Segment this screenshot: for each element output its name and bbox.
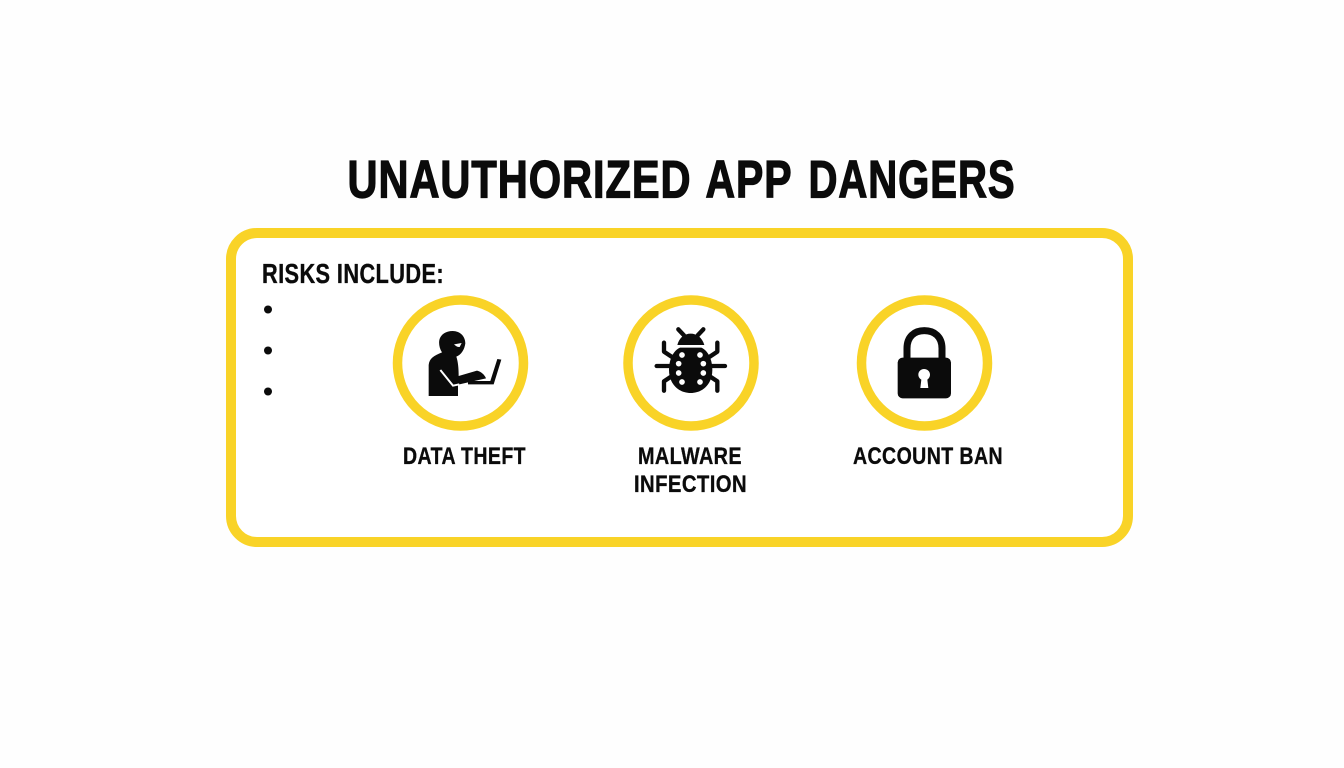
panel border	[231, 233, 1128, 542]
item: account ban	[853, 300, 1003, 470]
title: UNAUTHORIZED	[348, 150, 692, 210]
icon ring: data theft	[398, 300, 524, 426]
title	[348, 150, 1016, 210]
item: malware infection	[628, 300, 754, 498]
title: APP	[706, 150, 792, 210]
icon: hacker at laptop	[429, 331, 501, 396]
icon ring: account ban	[862, 300, 988, 426]
title: DANGERS	[808, 150, 1016, 210]
icon: padlock	[898, 331, 951, 398]
panel: risks	[231, 233, 1128, 542]
icon: bug	[657, 329, 725, 393]
panel heading: RISKS INCLUDE:	[262, 258, 444, 289]
label: account ban: ACCOUNT BAN	[853, 443, 1003, 470]
label: malware infection: MALWARE	[638, 443, 742, 470]
icon ring: malware	[628, 300, 754, 426]
label: data theft: DATA THEFT	[403, 443, 526, 470]
empty bullet list	[264, 306, 272, 396]
label: malware infection: INFECTION	[634, 471, 747, 498]
item: data theft	[398, 300, 526, 470]
label: malware infection	[634, 443, 747, 498]
